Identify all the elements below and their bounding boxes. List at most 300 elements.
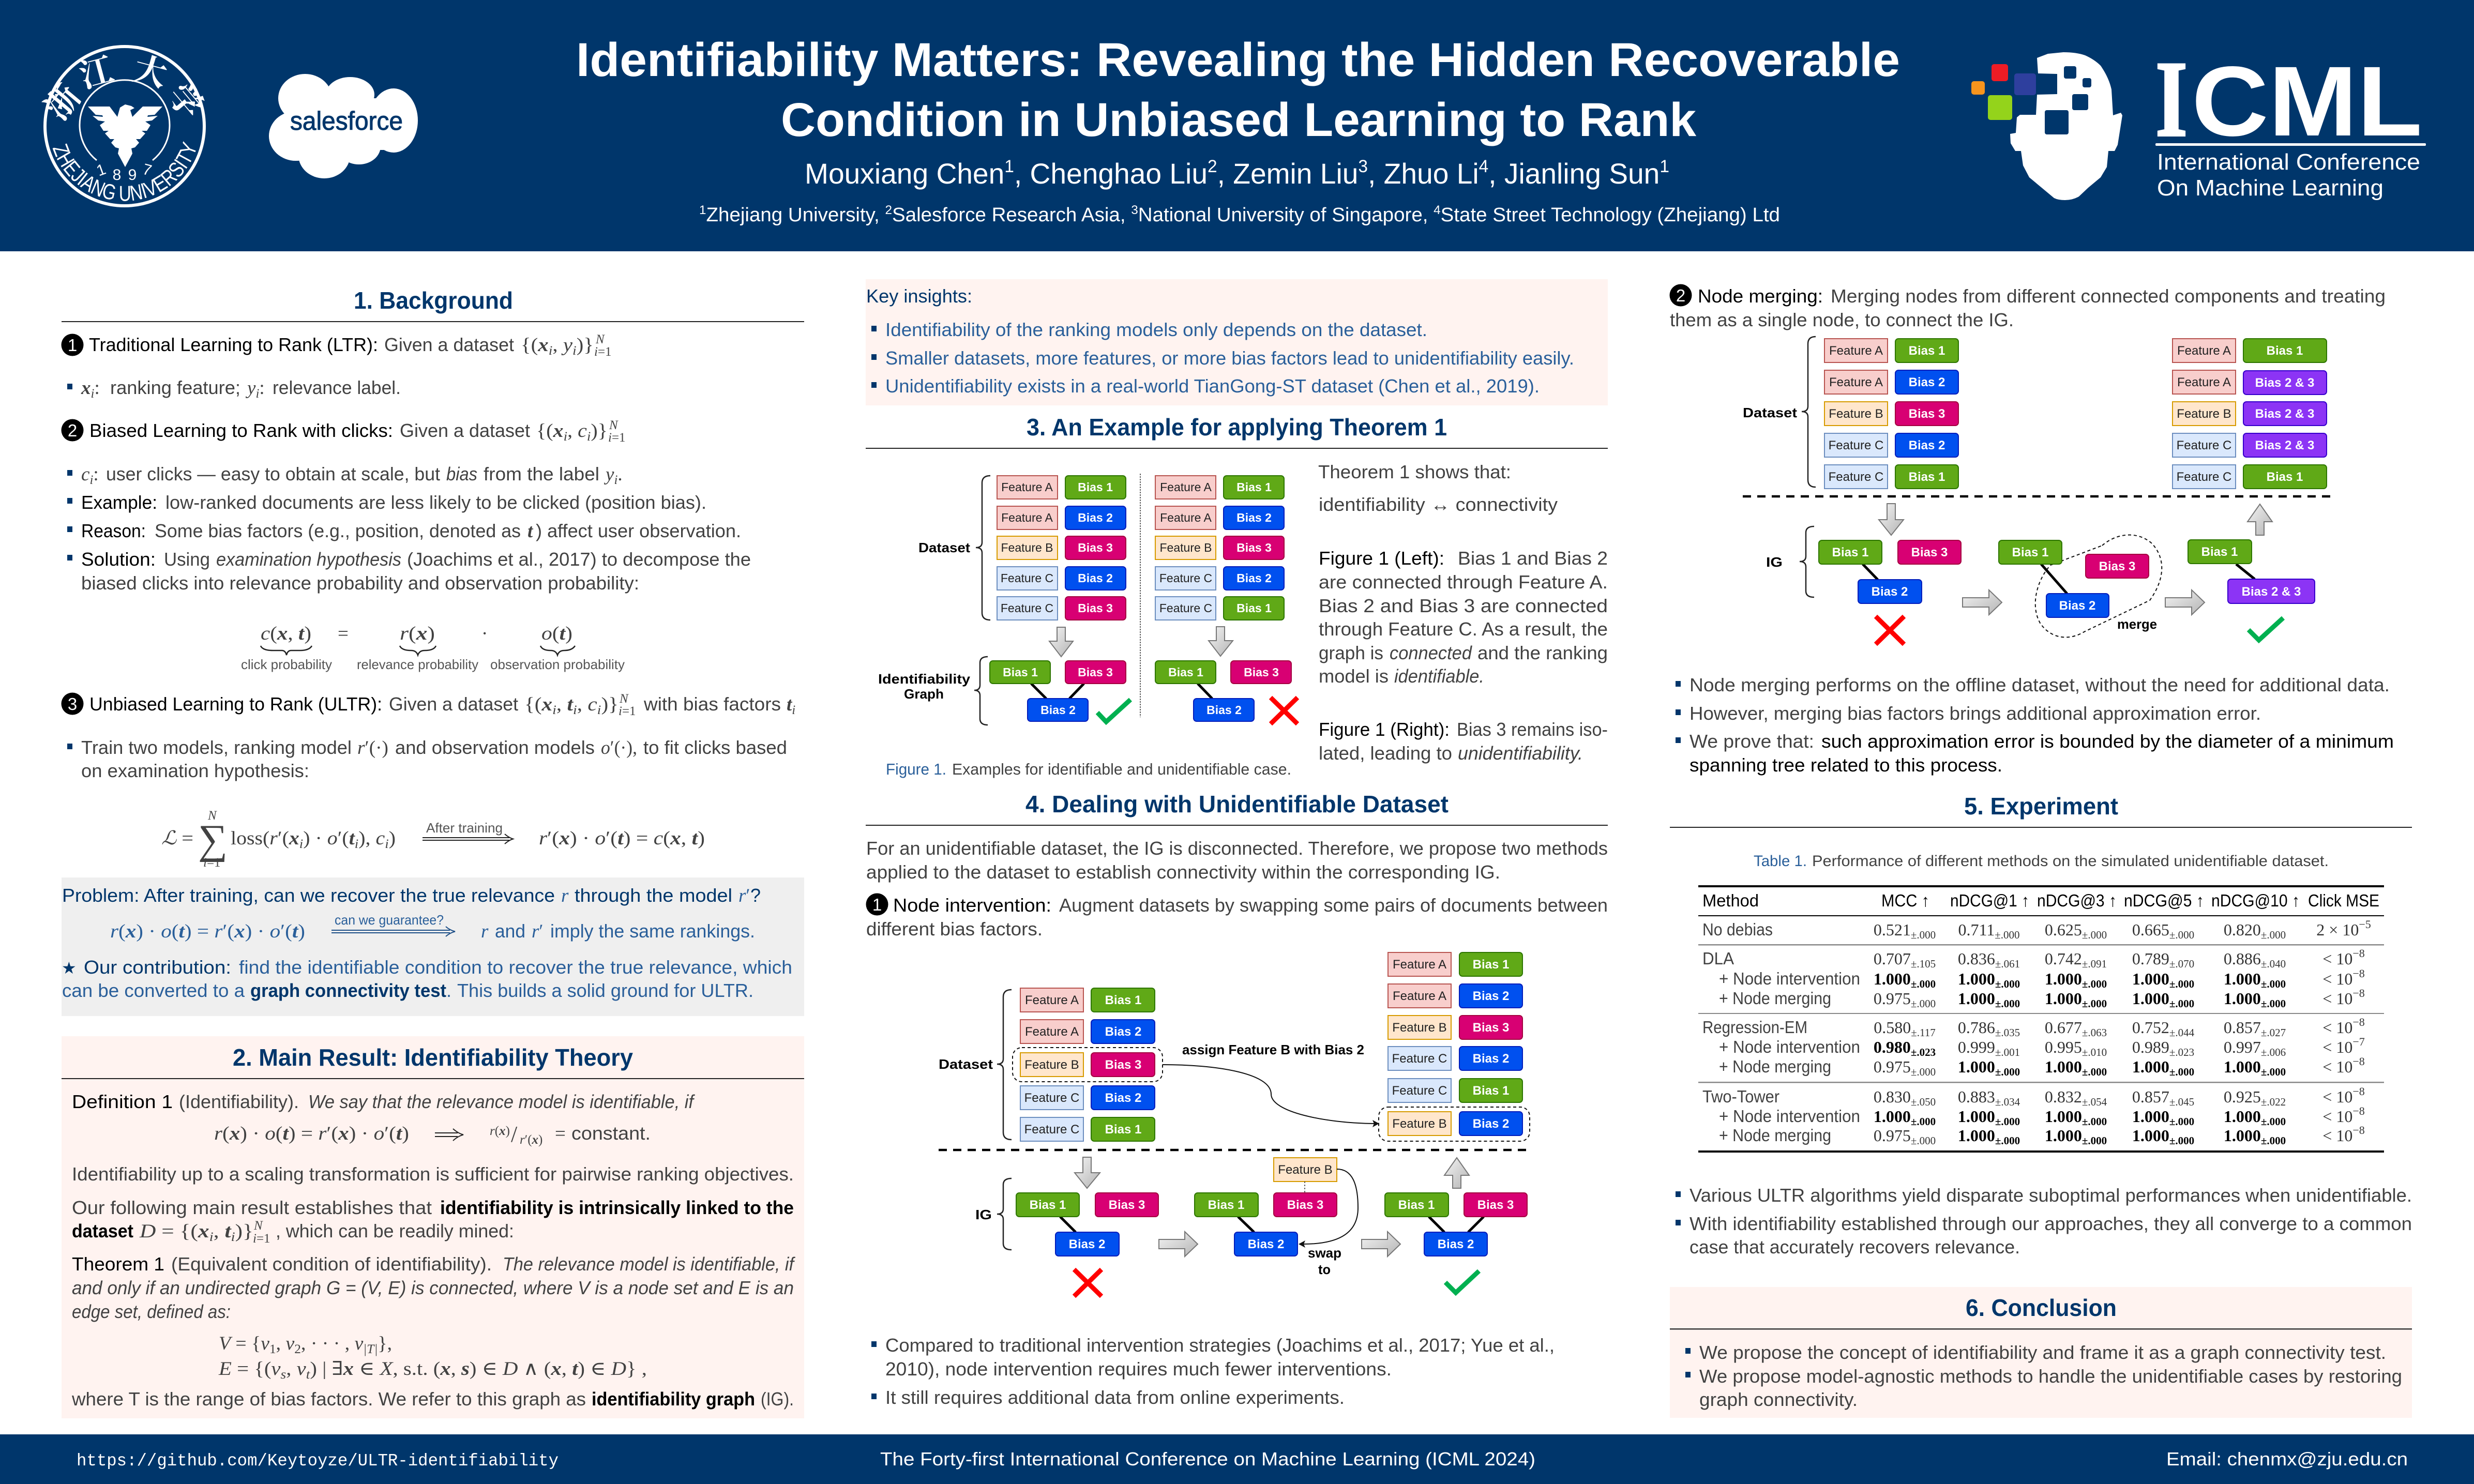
item 2: biased LTR: Given a dataset bbox=[400, 420, 530, 441]
bullets: insights: Identifiability of the ranking models only depends on the dataset. bbox=[885, 319, 1427, 340]
dataset table after: Bias 1 bbox=[1473, 958, 1509, 972]
graph: merge: Bias 1 bbox=[2012, 546, 2048, 559]
callout: problem and contribution: . bbox=[446, 980, 451, 1001]
dataset table after: Feature A bbox=[1393, 958, 1446, 972]
caption: figure 1: Figure 1. bbox=[886, 760, 946, 778]
item 3: unbiased LTR: Given a dataset bbox=[389, 693, 518, 715]
text: intro: For an unidentifiable dataset, the IG is disconnected. Therefore, we propose two methods bbox=[866, 838, 1608, 859]
title bbox=[576, 34, 1900, 146]
table values: 1.000±.000 bbox=[1958, 1057, 2020, 1078]
dataset table right bbox=[1155, 476, 1284, 620]
item 3: unbiased LTR: 3 bbox=[68, 694, 77, 714]
text: theorem explanation: are connected through Feature A. bbox=[1319, 571, 1608, 593]
item 2: biased LTR: N bbox=[609, 418, 618, 432]
callout: problem and contribution: through the model bbox=[575, 885, 732, 906]
theorem 1: and only if an undirected graph G = (V, E) is connected, where V is a node set and E is an bbox=[72, 1277, 794, 1298]
item 3: unbiased LTR: Unbiased Learning to Rank (ULTR): bbox=[89, 693, 382, 715]
affiliations: 1Zhejiang University, 2Salesforce Research Asia, 3National University of Singapore, 4State Street Technology (Zhejiang) Ltd bbox=[699, 203, 1780, 226]
graph: before: Bias 1 bbox=[1030, 1198, 1066, 1212]
dataset table left: Bias 2 bbox=[1078, 571, 1113, 585]
bullets: merging notes: We prove that: bbox=[1689, 731, 1814, 752]
text: node merging: 2 bbox=[1676, 286, 1685, 305]
bullet: train two models: and observation models bbox=[395, 737, 595, 758]
text: node intervention: different bias factors. bbox=[866, 918, 1043, 940]
caption: table 1: Performance of different methods on the simulated unidentifiable dataset. bbox=[1812, 853, 2329, 870]
heading: dealing: 4. Dealing with Unidentifiable Dataset bbox=[1025, 791, 1449, 817]
equation: click decomposition: relevance probability bbox=[357, 657, 478, 672]
equation: click decomposition: = bbox=[338, 623, 349, 644]
arrow: right bbox=[2165, 590, 2205, 615]
theorem 1: V = {v1, v2, · · · , v|T|}, bbox=[219, 1333, 392, 1356]
panel: 2. Main Result bbox=[62, 1036, 804, 1418]
bullets: experiment findings: With identifiability established through our approaches, they all converge to a common bbox=[1689, 1213, 2412, 1234]
bullets: merging notes bbox=[1676, 674, 2394, 776]
callout: problem and contribution: and bbox=[495, 920, 525, 942]
bullets: clicks, example, reason, solution: Using bbox=[164, 549, 210, 570]
text: main result statement: Our following main result establishes that bbox=[72, 1197, 432, 1218]
callout: problem and contribution: r′ bbox=[532, 921, 543, 942]
text: identifiability graph: (IG). bbox=[761, 1388, 794, 1410]
table values: 1.000±.000 bbox=[2224, 989, 2286, 1010]
footer banner bbox=[0, 1434, 2474, 1484]
definition 1: r(x) bbox=[490, 1124, 510, 1138]
bullets: clicks, example, reason, solution: bias bbox=[446, 463, 477, 484]
equation: click decomposition bbox=[241, 623, 625, 672]
equation: click decomposition: r(x) bbox=[400, 623, 435, 644]
table values: 0.707±.105 bbox=[1874, 949, 1936, 970]
bullets: insights: Unidentifiability exists in a real-world TianGong-ST dataset (Chen et al., 2019). bbox=[885, 375, 1540, 397]
bullets: clicks, example, reason, solution: biased clicks into relevance probability and observation probability: bbox=[81, 572, 639, 594]
item 3: unbiased LTR: ti bbox=[787, 694, 795, 717]
bullets: clicks, example, reason, solution: Reason: bbox=[81, 520, 146, 541]
panel: 3. Example bbox=[866, 414, 1608, 778]
dataset table before: Bias 2 bbox=[1105, 1025, 1141, 1039]
item 1: traditional LTR: Given a dataset bbox=[384, 334, 514, 355]
IG label and bracket: IG bbox=[1766, 554, 1783, 570]
dataset table after: Bias 2 & 3 bbox=[2255, 438, 2314, 452]
table values: < 10−7 bbox=[2322, 1035, 2365, 1056]
table values: 1.000±.000 bbox=[1874, 970, 1936, 990]
dataset label and bracket bbox=[918, 476, 990, 620]
footer: email: Email: chenmx@zju.edu.cn bbox=[2166, 1448, 2408, 1470]
table values: 0.975±.000 bbox=[1874, 1126, 1936, 1147]
table values: 1.000±.000 bbox=[2045, 1057, 2107, 1078]
caption: table 1: Table 1. bbox=[1754, 853, 1807, 870]
callout: problem and contribution: imply the same rankings. bbox=[550, 920, 755, 942]
logo: Zhejiang University seal: 8 bbox=[113, 166, 121, 184]
text: main result statement: D = {( xi, ti)} bbox=[139, 1221, 253, 1244]
table values: 0.857±.045 bbox=[2132, 1087, 2194, 1108]
dataset table before: Bias 3 bbox=[1105, 1058, 1141, 1072]
dataset table after: Feature A bbox=[2177, 344, 2231, 358]
table values: 0.832±.054 bbox=[2045, 1087, 2107, 1108]
row labels bbox=[1702, 920, 1860, 1145]
graph: merge: merge bbox=[2117, 616, 2157, 632]
item 2: biased LTR: {(xi, ci)} bbox=[536, 420, 608, 444]
row labels: + Node intervention bbox=[1719, 1107, 1860, 1126]
graph: swap bbox=[1195, 1158, 1358, 1277]
logo: Zhejiang University seal: ZHEJIANG UNIVERSITY bbox=[53, 141, 196, 201]
table values: 1.000±.000 bbox=[1958, 1126, 2020, 1147]
text: main result statement: identifiability is intrinsically linked to the bbox=[440, 1197, 794, 1218]
table values: 0.752±.044 bbox=[2132, 1018, 2195, 1039]
dataset table after: Feature B bbox=[1392, 1021, 1447, 1035]
definition 1: constant. bbox=[571, 1123, 651, 1144]
callout: problem and contribution: find the identifiable condition to recover the true relevance, which bbox=[239, 957, 792, 978]
text: node intervention: 1 bbox=[872, 895, 882, 914]
caption: figure 1: Examples for identifiable and unidentifiable case. bbox=[952, 760, 1291, 778]
table values: < 10−8 bbox=[2322, 1055, 2365, 1076]
table values: 0.886±.040 bbox=[2224, 949, 2286, 970]
dataset table before: Bias 1 bbox=[1909, 470, 1945, 484]
heading: Background: 1. Background bbox=[354, 287, 513, 314]
heading: experiment: 5. Experiment bbox=[1964, 793, 2118, 820]
bullet: train two models: to fit clicks based bbox=[643, 737, 787, 758]
dataset label and bracket bbox=[939, 990, 1012, 1140]
dataset table right: Feature C bbox=[1159, 571, 1212, 585]
title: Condition in Unbiased Learning to Rank bbox=[781, 94, 1697, 146]
graph: swap: Bias 2 bbox=[1248, 1237, 1284, 1251]
logo: Zhejiang University seal bbox=[32, 42, 216, 207]
dataset table before: Bias 1 bbox=[1909, 344, 1945, 358]
text: scaling transformation: Identifiability up to a scaling transformation is sufficient for pairwise ranking objectives. bbox=[72, 1163, 794, 1185]
bullets: conclusion bbox=[1685, 1342, 2402, 1410]
logo: ICML: On Machine Learning bbox=[2157, 175, 2384, 201]
figure 1 bbox=[878, 474, 1298, 725]
theorem 1: (Equivalent condition of identifiability). bbox=[171, 1253, 492, 1275]
item 2: biased LTR: Biased Learning to Rank with clicks: bbox=[89, 420, 393, 441]
item 1: traditional LTR: 1 bbox=[68, 336, 77, 355]
dataset table before: Bias 1 bbox=[1105, 993, 1141, 1007]
panel: 4. Dealing with Unidentifiable Dataset bbox=[866, 791, 1608, 1408]
table values: 0.786±.035 bbox=[1958, 1018, 2020, 1039]
arrow: right bbox=[1159, 1232, 1198, 1256]
table values: 0.980±.023 bbox=[1874, 1038, 1936, 1058]
bullets: clicks, example, reason, solution: from the label bbox=[484, 463, 599, 484]
bullets: experiment findings bbox=[1676, 1185, 2412, 1258]
bullets: clicks, example, reason, solution: yi. bbox=[604, 464, 623, 487]
table values: 0.521±.000 bbox=[1874, 920, 1936, 941]
dataset table before: Feature C bbox=[1829, 438, 1883, 452]
dataset table left: Bias 1 bbox=[1078, 480, 1113, 494]
table values: 2 × 10−5 bbox=[2316, 918, 2371, 939]
figure: node merging bbox=[1743, 337, 2333, 644]
arrow: right bbox=[1963, 590, 2002, 615]
graph: swap: Feature B bbox=[1278, 1163, 1333, 1177]
logo: Salesforce: salesforce bbox=[290, 107, 403, 135]
graph: swap: Bias 3 bbox=[1287, 1198, 1323, 1212]
dataset table before: Bias 3 bbox=[1909, 407, 1945, 421]
graph: connected: Bias 3 bbox=[1078, 665, 1113, 679]
theorem 1: edge set, defined as: bbox=[72, 1301, 231, 1322]
table values: 0.830±.050 bbox=[1874, 1087, 1936, 1108]
dataset table before: Feature B bbox=[1024, 1058, 1079, 1072]
text: theorem explanation: Theorem 1 shows that: bbox=[1318, 461, 1511, 482]
bullets: clicks, example, reason, solution: Some bias factors (e.g., position, denoted as bbox=[155, 520, 521, 541]
definition 1: r′(x) bbox=[520, 1133, 542, 1147]
dataset table right: Feature A bbox=[1160, 480, 1212, 494]
graph: merge: Bias 2 bbox=[2059, 599, 2095, 613]
arrow: down bbox=[1879, 504, 1904, 535]
dataset table before: Bias 2 bbox=[1105, 1091, 1141, 1105]
table values: 0.975±.000 bbox=[1874, 1057, 1936, 1078]
table values: 0.836±.061 bbox=[1958, 949, 2020, 970]
dataset table right: Bias 2 bbox=[1236, 571, 1272, 585]
table values: 1.000±.000 bbox=[2224, 970, 2286, 990]
table values: 1.000±.000 bbox=[2224, 1107, 2286, 1128]
dataset table after: Bias 3 bbox=[1473, 1021, 1509, 1035]
table values: < 10−8 bbox=[2322, 987, 2365, 1008]
text: theorem explanation: and the ranking bbox=[1477, 642, 1608, 663]
text: theorem explanation: Bias 2 and Bias 3 are connected bbox=[1319, 595, 1608, 616]
row labels: Two-Tower bbox=[1702, 1087, 1779, 1106]
panel: key insights bbox=[866, 279, 1608, 405]
item 1: traditional LTR: i=1 bbox=[594, 345, 612, 359]
bullets: conclusion: graph connectivity. bbox=[1699, 1389, 1858, 1410]
callout: problem and contribution: Our contribution: bbox=[84, 957, 231, 978]
table values: 0.625±.000 bbox=[2045, 920, 2107, 941]
bullets: intervention notes bbox=[871, 1335, 1555, 1408]
dataset table left: Bias 3 bbox=[1078, 601, 1113, 615]
text: intro: applied to the dataset to establish connectivity within the corresponding IG. bbox=[866, 861, 1500, 883]
table values: 1.000±.000 bbox=[1958, 970, 2020, 990]
arrow: down bbox=[1075, 1157, 1100, 1188]
table values: 0.997±.006 bbox=[2224, 1038, 2286, 1058]
bullets: merging notes: However, merging bias factors brings additional approximation error. bbox=[1689, 703, 2261, 724]
table values: 1.000±.000 bbox=[2045, 1107, 2107, 1128]
IG label and bracket bbox=[1766, 526, 1814, 597]
table values: 0.665±.000 bbox=[2132, 920, 2194, 941]
row labels: + Node merging bbox=[1719, 1057, 1831, 1076]
text: node merging: them as a single node, to connect the IG. bbox=[1670, 309, 2014, 330]
bullet: train two models: on examination hypothesis: bbox=[81, 760, 309, 781]
theorem 1 bbox=[72, 1253, 796, 1382]
callout: problem and contribution: ? bbox=[750, 885, 761, 906]
row labels: + Node intervention bbox=[1719, 969, 1860, 988]
equation: loss after training: N bbox=[207, 809, 217, 823]
text: node merging: Merging nodes from different connected components and treating bbox=[1831, 285, 2386, 307]
text: theorem explanation: lated, leading to bbox=[1319, 743, 1452, 764]
logo: ICML: I bbox=[2155, 39, 2188, 159]
callout: problem and contribution: This builds a solid ground for ULTR. bbox=[457, 980, 753, 1001]
dataset table before: Feature A bbox=[1829, 375, 1883, 389]
graph: before: Bias 3 bbox=[1109, 1198, 1145, 1212]
arrow: up bbox=[2247, 504, 2272, 535]
graph: swap: to bbox=[1318, 1262, 1331, 1277]
graph: after: Bias 1 bbox=[1398, 1198, 1435, 1212]
graph: before bbox=[1819, 540, 1961, 603]
dataset table right: Feature A bbox=[1160, 511, 1212, 524]
table values: 0.580±.117 bbox=[1874, 1018, 1936, 1039]
definition 1: = bbox=[555, 1123, 566, 1144]
dataset table after: Bias 1 bbox=[2267, 344, 2303, 358]
dataset table before bbox=[1824, 339, 1958, 489]
dataset table before: Feature B bbox=[1829, 407, 1883, 421]
table values: 0.857±.027 bbox=[2224, 1018, 2286, 1039]
dataset table right: Feature C bbox=[1159, 601, 1212, 615]
item 3: unbiased LTR: with bias factors bbox=[643, 693, 781, 715]
graph: before: Bias 1 bbox=[1832, 546, 1868, 559]
table values: 1.000±.000 bbox=[2132, 1107, 2194, 1128]
graph: merge: Bias 3 bbox=[2099, 559, 2135, 573]
arrow: right bbox=[1362, 1232, 1400, 1256]
dataset table left: Feature A bbox=[1001, 511, 1053, 524]
graph: connected: Bias 2 bbox=[1040, 703, 1076, 717]
bullets: merging notes: spanning tree related to this process. bbox=[1689, 754, 2002, 776]
table values: 1.000±.000 bbox=[1874, 1107, 1936, 1128]
graph: swap: Bias 1 bbox=[1208, 1198, 1244, 1212]
dataset table before: Feature C bbox=[1024, 1123, 1079, 1137]
table values: 0.711±.000 bbox=[1958, 920, 2020, 941]
icon: cross bbox=[1074, 1269, 1102, 1296]
table header: nDCG@10 ↑ bbox=[2211, 891, 2300, 910]
graph: after bbox=[2188, 540, 2315, 603]
dataset table left: Feature C bbox=[1001, 571, 1053, 585]
title: Identifiability Matters: Revealing the Hidden Recoverable bbox=[576, 34, 1900, 86]
graph: disconnected: Bias 2 bbox=[1206, 703, 1242, 717]
dataset table after: Feature B bbox=[1392, 1117, 1447, 1131]
theorem 1: Theorem 1 bbox=[72, 1253, 164, 1275]
text: theorem explanation: Bias 1 and Bias 2 bbox=[1458, 548, 1608, 569]
text: theorem explanation: identifiability ↔ connectivity bbox=[1319, 494, 1558, 515]
item 3: unbiased LTR bbox=[61, 692, 795, 718]
table values: 0.989±.023 bbox=[2132, 1038, 2194, 1058]
dataset table after: Feature A bbox=[2177, 375, 2231, 389]
dataset table left: Bias 3 bbox=[1078, 541, 1113, 554]
bullets: conclusion: We propose the concept of identifiability and frame it as a graph connectivity test. bbox=[1699, 1342, 2386, 1363]
equation: loss after training: loss(r′(xi) · o′(ti), ci) bbox=[231, 828, 396, 851]
dataset label and bracket: Dataset bbox=[1743, 405, 1797, 420]
panel: 6. Conclusion bbox=[1670, 1287, 2412, 1418]
bullet: ranking feature: ranking feature; bbox=[110, 377, 240, 398]
icon: check bbox=[1097, 700, 1130, 722]
logo: Zhejiang University seal: 大 bbox=[129, 42, 173, 97]
bullets: clicks, example, reason, solution bbox=[67, 463, 751, 594]
text: theorem explanation: unidentifiability. bbox=[1458, 743, 1583, 764]
dataset table before: Bias 2 bbox=[1909, 438, 1945, 452]
table values: < 10−8 bbox=[2322, 1124, 2365, 1145]
bullets: experiment findings: case that accurately recovers relevance. bbox=[1689, 1236, 2020, 1258]
identifiability graph label and bracket bbox=[878, 657, 988, 725]
graph: connected: Bias 1 bbox=[1003, 665, 1038, 679]
item 1: traditional LTR: Traditional Learning to Rank (LTR): bbox=[89, 334, 378, 355]
table values bbox=[1874, 918, 2371, 1147]
dataset table before: Bias 2 bbox=[1909, 375, 1945, 389]
heading: example: 3. An Example for applying Theorem 1 bbox=[1027, 414, 1447, 441]
equation: click decomposition: click probability bbox=[241, 657, 332, 672]
text: theorem explanation bbox=[1318, 461, 1608, 764]
table header: MCC ↑ bbox=[1881, 891, 1929, 910]
table values: 0.742±.091 bbox=[2045, 949, 2107, 970]
text: theorem explanation: connected bbox=[1390, 642, 1472, 663]
callout: problem and contribution: ★ bbox=[62, 958, 77, 978]
table values: 1.000±.000 bbox=[2045, 989, 2107, 1010]
logo: Zhejiang University seal: 1 bbox=[94, 161, 108, 179]
icon: cross bbox=[1271, 698, 1298, 724]
dataset table before: Feature A bbox=[1025, 1025, 1079, 1039]
figure: node intervention bbox=[939, 952, 1530, 1296]
graph: after bbox=[1385, 1193, 1527, 1256]
dataset table after bbox=[1379, 952, 1530, 1141]
row labels: Regression-EM bbox=[1702, 1018, 1807, 1037]
table values: 1.000±.000 bbox=[2224, 1057, 2286, 1078]
icon: check bbox=[1445, 1271, 1479, 1293]
bullets: clicks, example, reason, solution: t bbox=[527, 521, 534, 542]
dataset table left: Feature A bbox=[1001, 480, 1053, 494]
table header: nDCG@5 ↑ bbox=[2124, 891, 2204, 910]
dataset table left bbox=[997, 476, 1126, 620]
table header bbox=[1702, 891, 2379, 910]
text: intro bbox=[866, 838, 1608, 883]
table values: 0.975±.000 bbox=[1874, 989, 1936, 1010]
text: theorem explanation: graph is bbox=[1319, 642, 1383, 663]
text: theorem explanation: Bias 3 remains iso- bbox=[1457, 719, 1608, 740]
dataset table after: Feature C bbox=[2177, 438, 2231, 452]
dataset table right: Bias 1 bbox=[1236, 601, 1272, 615]
logo: Zhejiang University seal: 浙 bbox=[32, 73, 89, 129]
graph: after: Bias 2 & 3 bbox=[2242, 585, 2301, 599]
row labels: + Node merging bbox=[1719, 989, 1831, 1008]
text: identifiability graph: identifiability graph bbox=[592, 1388, 755, 1410]
callout: problem and contribution: can be converted to a bbox=[62, 980, 245, 1001]
graph: after: Bias 2 bbox=[1438, 1237, 1474, 1251]
graph: after: Bias 3 bbox=[1477, 1198, 1514, 1212]
bullet: train two models: Train two models, ranking model bbox=[81, 737, 352, 758]
text: node intervention: Node intervention: bbox=[893, 895, 1051, 916]
definition 1: We say that the relevance model is identifiable, if bbox=[308, 1091, 696, 1112]
callout: problem and contribution: r bbox=[481, 921, 489, 942]
definition 1: / bbox=[511, 1122, 518, 1147]
table values: < 10−8 bbox=[2322, 1104, 2365, 1126]
bullets: intervention notes: Compared to traditional intervention strategies (Joachims et al., 2017; Yue et al., bbox=[885, 1335, 1555, 1356]
text: main result statement: , which can be readily mined: bbox=[276, 1220, 514, 1241]
bullet: train two models bbox=[67, 737, 787, 781]
item 3: unbiased LTR: {(xi, ti, ci)} bbox=[524, 694, 618, 717]
panel: 5. Experiment bbox=[1670, 793, 2412, 1258]
logo: ICML: International Conference bbox=[2157, 149, 2420, 175]
text: identifiability graph bbox=[71, 1388, 794, 1410]
header banner bbox=[0, 0, 2474, 251]
dataset table right: Bias 2 bbox=[1236, 511, 1272, 524]
bullet: ranking feature: yi: bbox=[245, 377, 265, 401]
graph: before: Bias 2 bbox=[1069, 1237, 1105, 1251]
icon: check bbox=[2249, 618, 2283, 640]
dataset table left: Feature B bbox=[1001, 541, 1053, 554]
equation: loss after training: r′(x) · o′(t) = c(x, t) bbox=[539, 828, 705, 849]
dataset table after: Bias 1 bbox=[1473, 1084, 1509, 1098]
graph: connected bbox=[990, 661, 1126, 721]
dataset table right: Feature B bbox=[1159, 541, 1212, 554]
heading: conclusion: 6. Conclusion bbox=[1966, 1294, 2117, 1321]
definition 1 bbox=[72, 1091, 696, 1147]
arrow: right down bbox=[1209, 627, 1233, 656]
table values: 0.925±.022 bbox=[2224, 1087, 2286, 1108]
logo: Zhejiang University seal: 江 bbox=[73, 43, 118, 98]
logo: Salesforce bbox=[269, 74, 418, 178]
text: theorem explanation: Figure 1 (Right): bbox=[1319, 719, 1450, 740]
callout: problem and contribution bbox=[62, 877, 804, 1016]
bullets: clicks, example, reason, solution: user clicks — easy to obtain at scale, but bbox=[106, 463, 440, 484]
logo: ICML: CML bbox=[2192, 46, 2422, 157]
table header: nDCG@1 ↑ bbox=[1950, 891, 2029, 910]
identifiability graph label and bracket: Identifiability bbox=[878, 671, 971, 687]
IG label and bracket bbox=[975, 1178, 1012, 1250]
bullets: clicks, example, reason, solution: low-ranked documents are less likely to be clicked (position bias). bbox=[165, 492, 706, 513]
text: node merging: Node merging: bbox=[1698, 285, 1823, 307]
bullets: clicks, example, reason, solution: (Joachims et al., 2017) to decompose the bbox=[407, 549, 751, 570]
bullets: experiment findings: Various ULTR algorithms yield disparate suboptimal performances when unidentifiable. bbox=[1689, 1185, 2412, 1206]
callout: problem and contribution: r′ bbox=[738, 885, 750, 906]
